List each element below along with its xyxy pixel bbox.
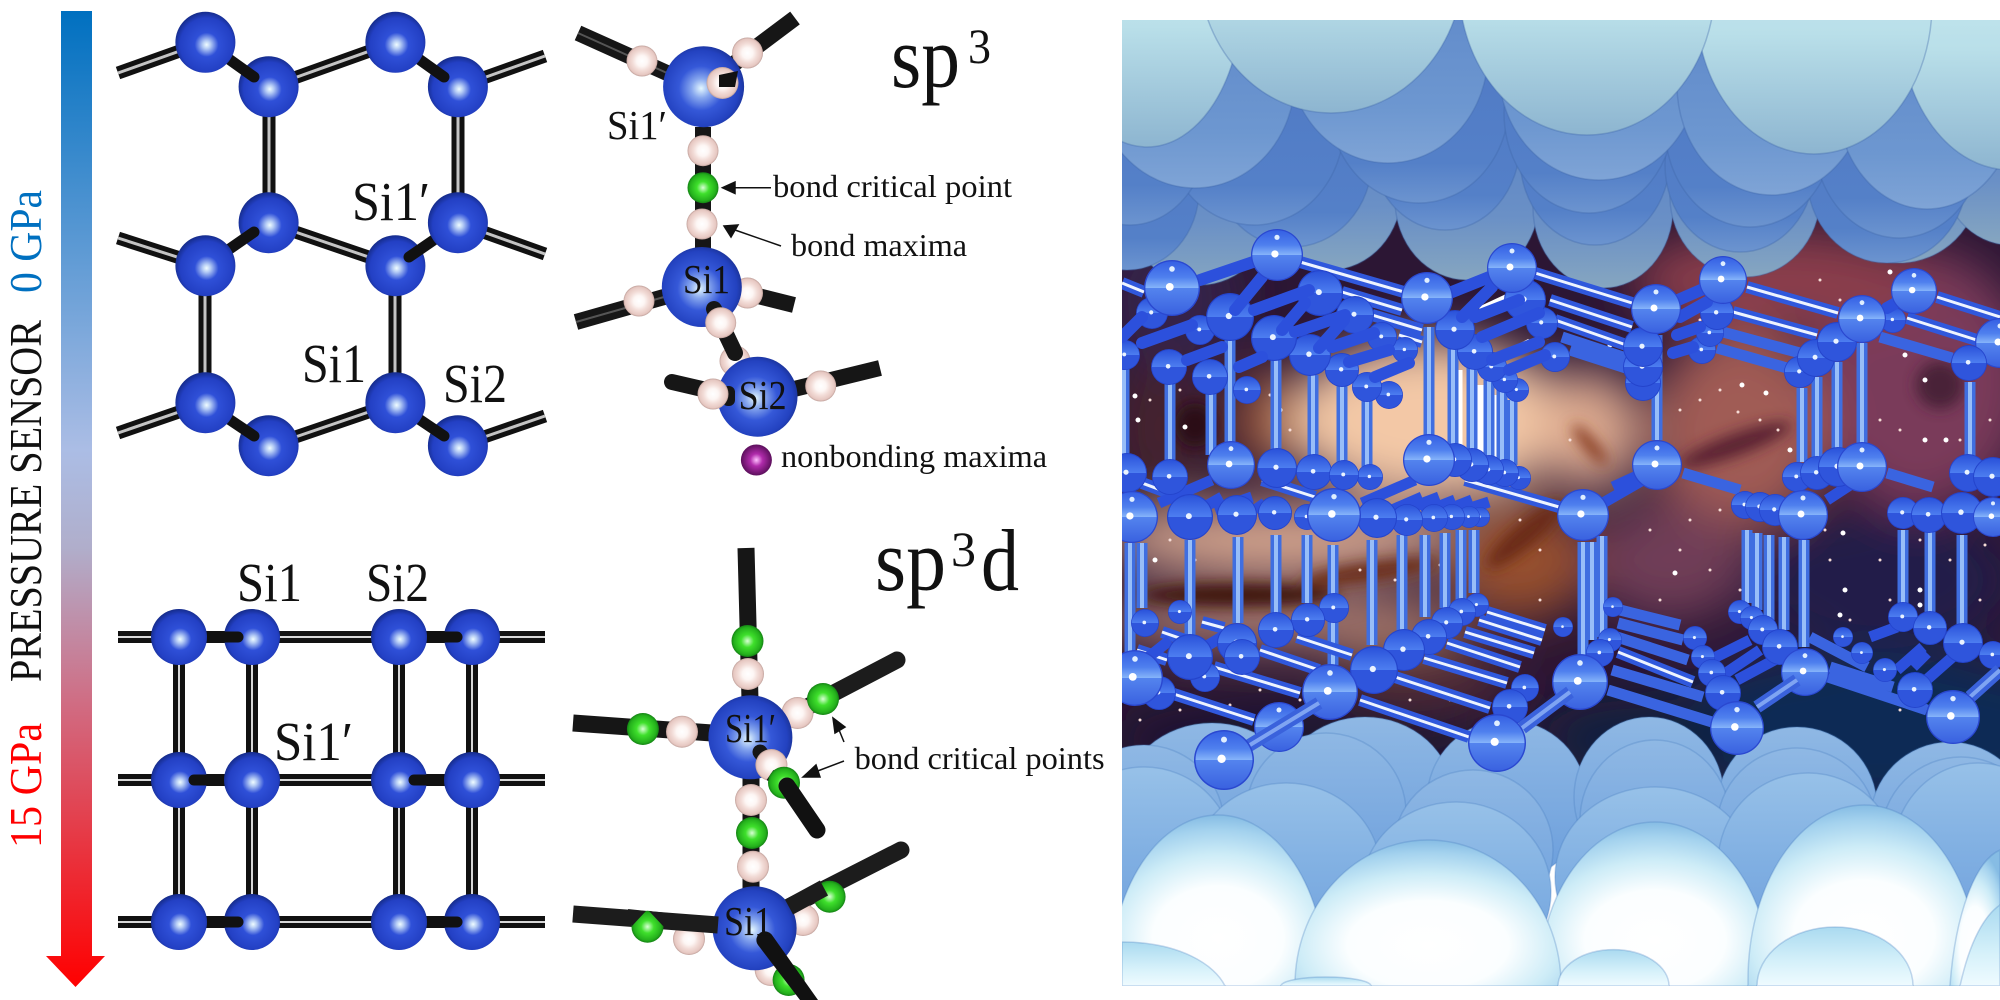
rear rounded bonds (789, 660, 901, 907)
middle sheet rods (1159, 470, 1853, 513)
atoms above short bonds (151, 609, 500, 950)
label: Si1 prime: Si1′ (725, 705, 776, 751)
receding lattice rods (1122, 262, 2000, 737)
panel: sp3 honeycomb lattice (118, 12, 545, 476)
label: Si2: Si2 (739, 372, 787, 418)
label: Si1 prime: Si1′ (274, 711, 353, 772)
label: Si1 prime: Si1′ (607, 102, 667, 148)
top sheet front atoms (1144, 229, 2000, 381)
label: Si1: Si1 (302, 333, 366, 394)
label: nonbonding maxima: nonbonding maxima (781, 438, 1047, 474)
label: Si1: Si1 (237, 552, 302, 613)
atom Si2 (718, 357, 798, 437)
bond maxima behind atoms (624, 38, 836, 402)
stars (1135, 235, 1990, 720)
white gaps behind rear rods (1459, 296, 1530, 462)
lattice bonds outer (118, 42, 545, 446)
nonbonding maxima marker (741, 444, 772, 476)
bond critical point marker (688, 172, 718, 203)
title: sp3d (875, 513, 1019, 610)
title: sp3: 3 (968, 18, 991, 74)
top sheet rear atoms (1110, 270, 1906, 409)
label: bond critical point: bond critical point (773, 168, 1012, 204)
label: bond maxima: bond maxima (791, 227, 967, 263)
bond sheen (576, 33, 667, 322)
arrow to bond maxima (724, 225, 781, 246)
label: Si1 prime: Si1′ (352, 171, 430, 232)
lower sheet front atoms (1194, 648, 2000, 790)
label: 15 GPa: 15 GPa (0, 723, 51, 848)
atoms beneath short bonds (151, 609, 500, 950)
top sheet short rods (1122, 258, 1910, 377)
top anvil atoms (1122, 20, 2000, 288)
panel: sp3 electron density detail (576, 10, 1047, 476)
short thick bonds (205, 42, 457, 436)
middle sheet atoms (1106, 434, 2000, 543)
title: sp3: sp (891, 10, 960, 107)
lower sheet rear atoms (1107, 593, 2000, 725)
panel: sp3d electron density detail (573, 513, 1105, 1000)
title: sp3d: sp (875, 513, 946, 610)
title: sp3d: 3 (951, 521, 976, 577)
rear bonds (576, 18, 880, 390)
gradient arrow from 0 GPa to 15 GPa (46, 11, 105, 987)
label: Si2: Si2 (443, 353, 507, 414)
panel: sp3d square lattice (118, 552, 545, 950)
label: 0 GPa: 0 GPa (0, 190, 51, 293)
lower sheet short rods (1145, 627, 1957, 683)
critical points and maxima behind atoms (627, 625, 839, 986)
atom Si1 prime (663, 46, 744, 127)
atom Si1 (713, 886, 797, 970)
vertical lattice rods (1124, 327, 1970, 665)
atom Si1 prime (708, 695, 792, 779)
galaxy background (1122, 218, 2000, 793)
lattice bonds highlight (118, 637, 545, 922)
front bonds and points (573, 749, 846, 1000)
lattice bonds outer (118, 637, 545, 922)
front bonds and maxima (672, 67, 738, 410)
lattice bonds highlight (118, 42, 545, 446)
bottom anvil atoms (1054, 717, 2000, 986)
atom Si1 (662, 247, 742, 327)
rear sheet plain rods (1562, 332, 1952, 722)
label: Si1: Si1 (724, 898, 772, 944)
label: pressure sensor: PRESSURE SENSOR (0, 320, 51, 682)
label: bond critical points: bond critical points (855, 740, 1105, 776)
label: Si2: Si2 (366, 552, 429, 613)
label: Si1: Si1 (683, 256, 730, 302)
title: sp3d: d (981, 513, 1019, 610)
arrows to bond critical points (803, 718, 845, 777)
panel: pressure sensor scale (0, 11, 105, 987)
atoms beneath short bonds (239, 56, 488, 476)
short thick bonds (194, 637, 457, 922)
arrow to bond critical point (722, 182, 771, 194)
rear bonds (573, 548, 751, 893)
panel: 3D lattice compressed between anvils over galaxy (1050, 0, 2000, 986)
atoms above short bonds (175, 12, 488, 433)
